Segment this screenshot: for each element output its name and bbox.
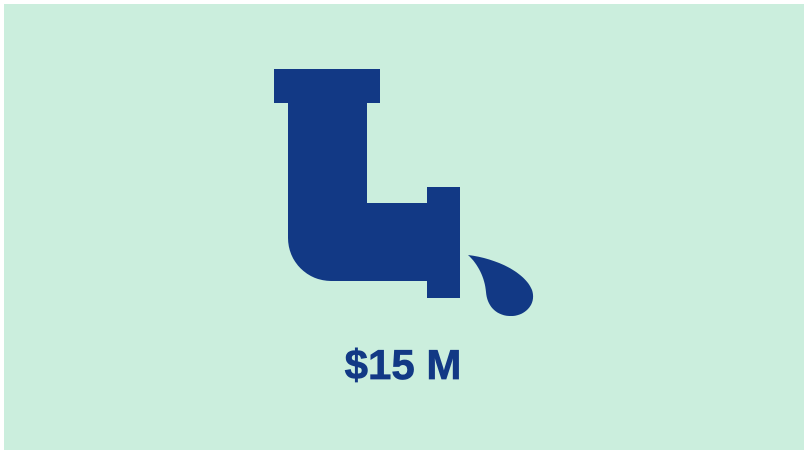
pipe body: [274, 69, 460, 298]
label: amount: $15 M: [345, 341, 461, 388]
icon: water drop: [468, 255, 533, 316]
